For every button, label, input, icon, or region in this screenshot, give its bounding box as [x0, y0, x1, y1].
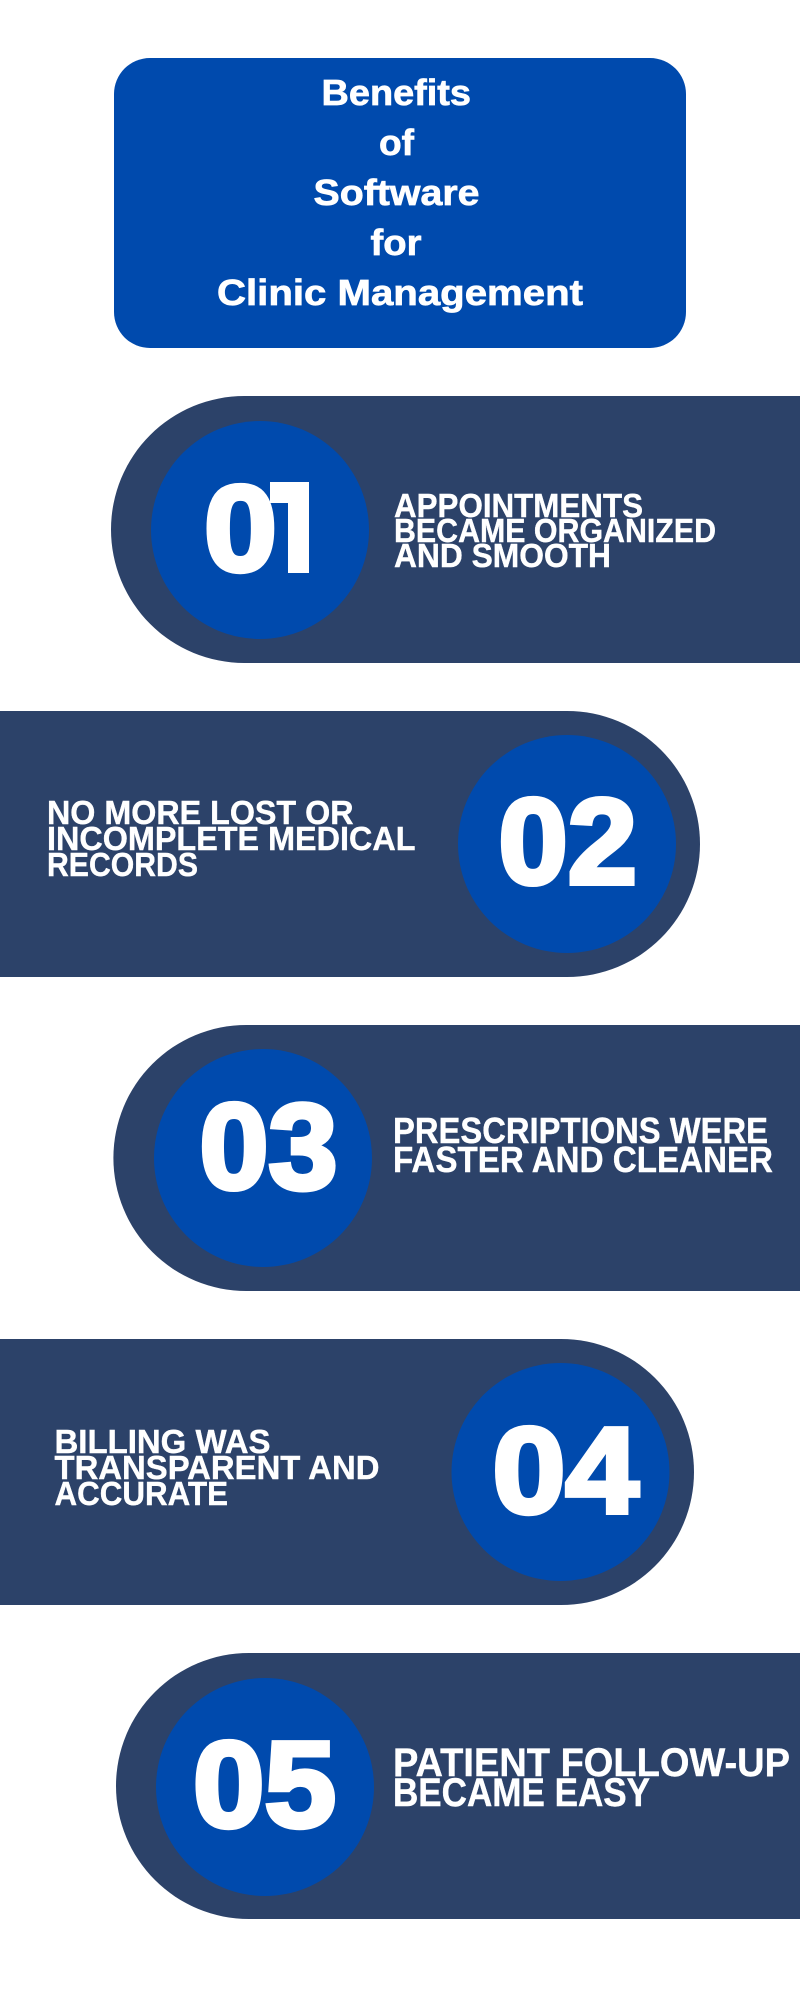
text: patient follow-up: BECAME EASY: [393, 1771, 650, 1815]
heading: title text: Software: [314, 172, 480, 213]
text: prescriptions: [393, 1110, 773, 1180]
text: medical records: RECORDS: [47, 846, 198, 883]
number badge 02: 02: [498, 774, 637, 910]
text: billing: ACCURATE: [54, 1475, 228, 1512]
number badge 03: 03: [200, 1078, 338, 1214]
panel: benefit 05: [116, 1653, 800, 1919]
text: prescriptions: FASTER AND CLEANER: [393, 1139, 773, 1180]
text: billing: BILLING WAS: [54, 1423, 270, 1460]
panel: benefit 02: [0, 711, 700, 977]
number badge 03: [154, 1049, 372, 1267]
text: appointments: [394, 487, 716, 574]
number badge 05: [156, 1678, 374, 1896]
heading: title text: of: [379, 122, 415, 163]
panel: benefit 01: [111, 396, 800, 663]
number badge 04: [452, 1363, 670, 1581]
text: appointments: APPOINTMENTS: [394, 487, 643, 524]
number badge 04: 04: [492, 1402, 639, 1538]
text: medical records: INCOMPLETE MEDICAL: [47, 820, 416, 857]
panel: benefit 03: [113, 1025, 800, 1291]
panel: title: [114, 58, 686, 348]
panel: benefit 04: [0, 1339, 694, 1605]
heading: title text: for: [370, 222, 422, 263]
number badge 01: [151, 421, 369, 639]
heading: title text: [217, 72, 583, 313]
text: prescriptions: PRESCRIPTIONS WERE: [393, 1110, 768, 1151]
text: billing: [54, 1423, 380, 1512]
text: appointments: BECAME ORGANIZED: [394, 512, 716, 549]
text: medical records: [47, 794, 416, 883]
number badge 01: 0: [204, 460, 277, 596]
text: appointments: AND SMOOTH: [394, 537, 611, 574]
number badge 05: 05: [193, 1716, 336, 1852]
heading: title text: Benefits: [322, 72, 471, 113]
number badge 01: 1: [287, 460, 309, 596]
text: patient follow-up: [393, 1741, 790, 1815]
heading: title text: Clinic Management: [217, 272, 583, 313]
number badge 02: [458, 735, 676, 953]
text: billing: TRANSPARENT AND: [54, 1449, 380, 1486]
text: patient follow-up: PATIENT FOLLOW-UP: [393, 1741, 790, 1785]
text: medical records: NO MORE LOST OR: [47, 794, 354, 831]
